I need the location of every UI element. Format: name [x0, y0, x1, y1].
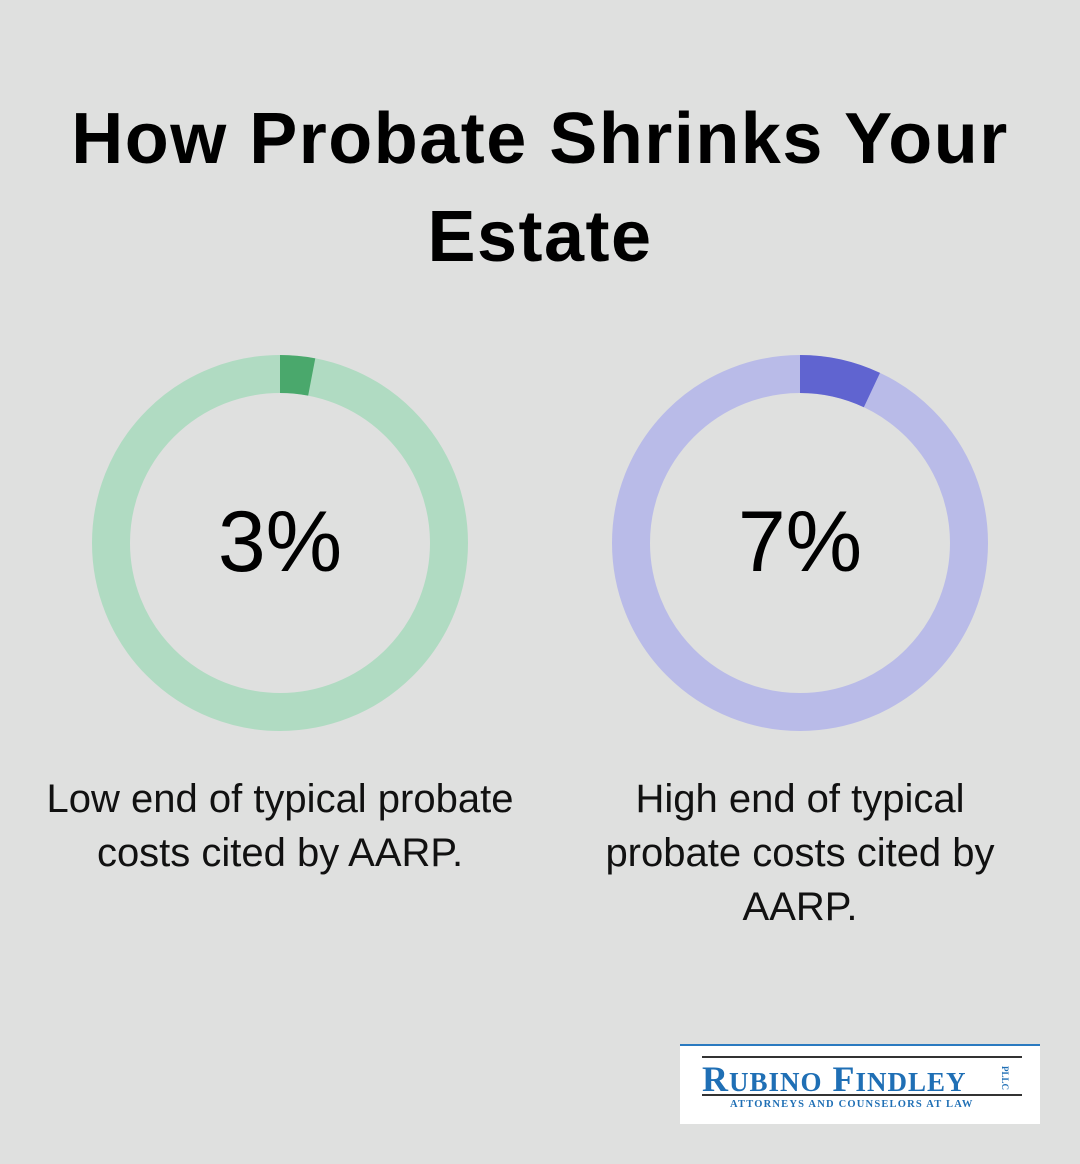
logo: PLLC	[1000, 1066, 1010, 1090]
logo	[680, 1044, 1040, 1124]
chart: 7% donut: 7%	[738, 494, 862, 590]
caption: low end: Low end of typical probate costs cited by AARP.	[46, 777, 513, 875]
chart: 3% donut	[92, 355, 468, 731]
caption: high end: High end of typical probate costs cited by AARP.	[605, 777, 995, 929]
chart: 3% donut: 3%	[218, 494, 342, 590]
title: How Probate Shrinks Your	[71, 99, 1009, 179]
title: Estate	[427, 197, 653, 277]
logo: ATTORNEYS AND COUNSELORS AT LAW	[730, 1099, 974, 1110]
chart: 7% donut	[612, 355, 988, 731]
logo: RUBINO FINDLEY	[702, 1059, 967, 1099]
title	[71, 99, 1009, 277]
